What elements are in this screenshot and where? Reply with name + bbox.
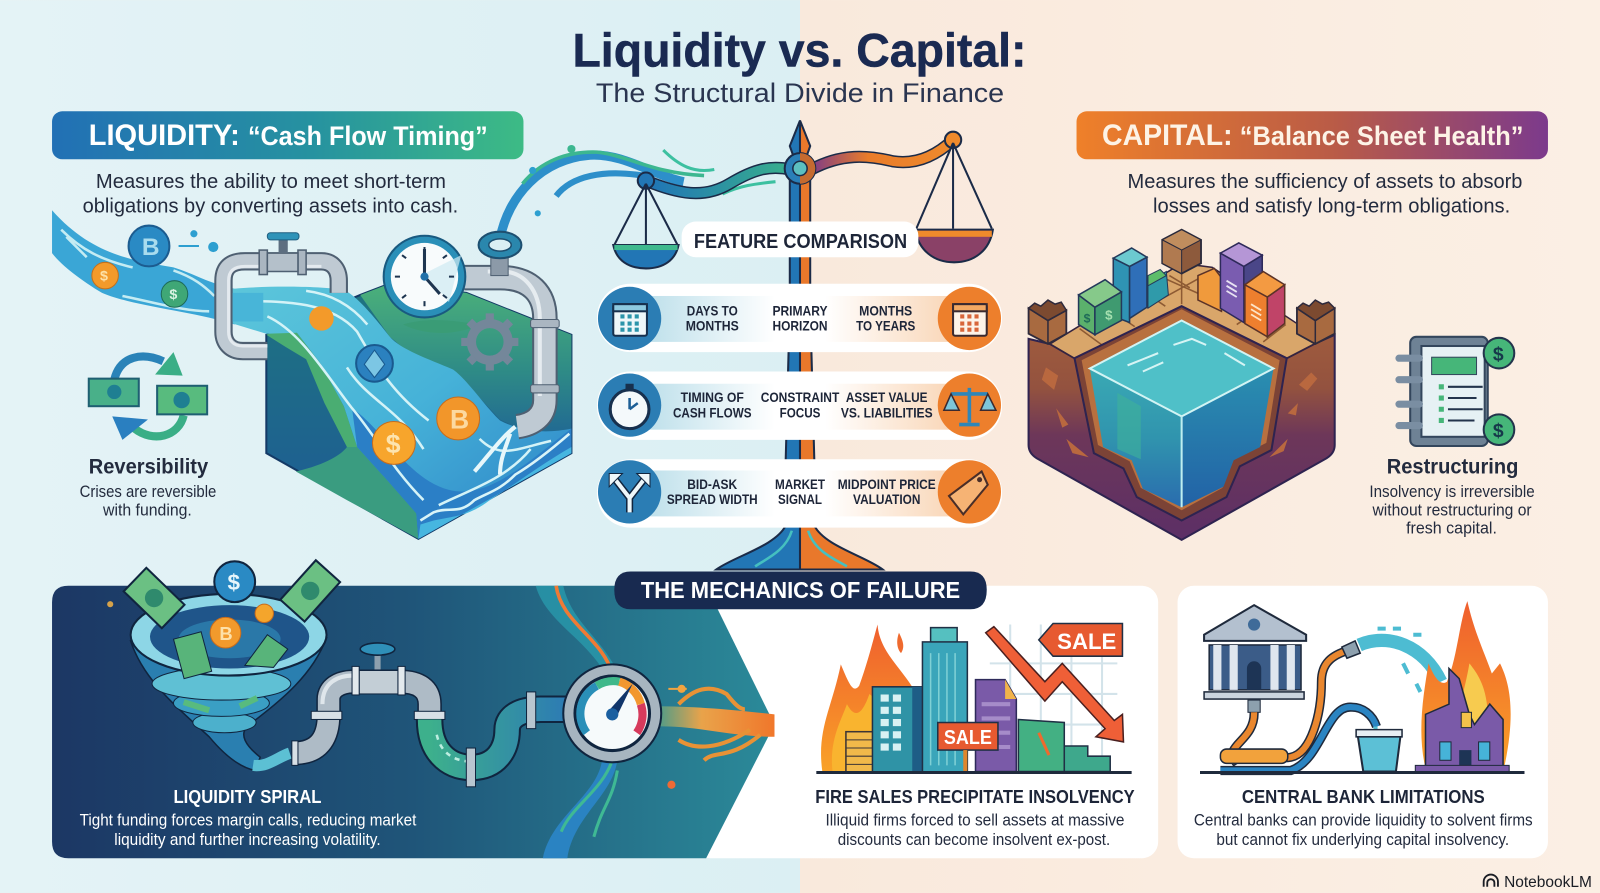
icon: restructuring ledger: $ xyxy=(1493,420,1504,442)
purple building xyxy=(1220,243,1262,323)
panel: liquidity spiral xyxy=(52,560,774,858)
beam left xyxy=(646,168,791,193)
panel: capital header xyxy=(1077,111,1548,159)
panel: fire sales: FIRE SALES PRECIPITATE INSOLVENCY xyxy=(815,786,1135,807)
icon: stopwatch xyxy=(598,374,661,437)
comparison row: primary horizon: TO YEARS xyxy=(856,319,915,335)
icon: fork arrows xyxy=(598,460,661,524)
tornado tail to pipe xyxy=(253,753,290,766)
tornado funnel xyxy=(131,594,327,770)
text: reversibility: Crises are reversible xyxy=(80,483,216,501)
chart: falling market: SALE xyxy=(944,727,992,749)
left pan xyxy=(638,173,654,189)
beam right xyxy=(811,140,953,169)
comparison row: market signal: SPREAD WIDTH xyxy=(667,492,758,508)
illustration: water flowing through pipes onto a block: B xyxy=(142,234,160,261)
pole left half xyxy=(716,120,800,569)
panel: capital header: CAPITAL: xyxy=(1102,119,1233,152)
text: restructuring: Restructuring xyxy=(1387,455,1518,479)
pole right half xyxy=(800,120,883,569)
pipe section: coloured xyxy=(430,692,571,787)
illustration: water flowing through pipes onto a block: $ xyxy=(169,287,177,303)
balance scale xyxy=(613,120,993,569)
icon: gauge xyxy=(563,664,661,762)
pipe section: gray xyxy=(292,643,445,765)
illustration: water flowing through pipes onto a block: B xyxy=(450,405,469,435)
heading: the mechanics of failure xyxy=(614,572,987,609)
text: central bank limitations: CENTRAL BANK LIMITATIONS xyxy=(1242,786,1485,807)
comparison row: market signal: BID-ASK xyxy=(687,477,738,493)
cube faces xyxy=(1090,368,1182,507)
flow out of gauge xyxy=(653,706,774,737)
text: reversibility: Reversibility xyxy=(89,455,208,479)
text: liquidity definition: Measures the ability to meet short-term xyxy=(96,171,446,193)
river xyxy=(233,287,571,539)
pit wall xyxy=(1074,306,1287,520)
small orange building xyxy=(1198,268,1221,311)
icon: orange calendar xyxy=(938,287,1001,350)
text: restructuring: without restructuring or xyxy=(1371,501,1532,519)
illustration: water flowing through pipes onto a block: $ xyxy=(386,429,401,459)
gear xyxy=(471,324,508,360)
panel: liquidity header: “Cash Flow Timing” xyxy=(248,121,488,151)
right castle tower xyxy=(1297,300,1335,344)
icon: restructuring ledger: $ xyxy=(1493,343,1504,365)
text: central bank limitations xyxy=(1194,786,1533,849)
icon: orange scales xyxy=(938,374,1001,437)
rim tiles xyxy=(1050,263,1314,358)
text: capital definition: Measures the sufficiency of assets to absorb xyxy=(1128,171,1522,193)
panel: central bank limitations xyxy=(1178,586,1548,858)
river over pipe xyxy=(233,293,263,322)
comparison row: constraint focus: TIMING OF xyxy=(681,390,744,406)
right pan xyxy=(945,132,961,148)
comparison row: primary horizon: MONTHS xyxy=(859,303,912,319)
comparison row: market signal: SIGNAL xyxy=(778,492,822,508)
clock xyxy=(384,236,465,317)
highlights xyxy=(245,291,551,505)
text: restructuring: fresh capital. xyxy=(1406,520,1497,538)
illustration: capital block with deep cube xyxy=(1029,230,1335,540)
comparison row: market signal: MIDPOINT PRICE xyxy=(838,477,936,493)
icon: price tag xyxy=(938,460,1001,524)
text: reversibility xyxy=(80,455,216,519)
chart: falling market xyxy=(816,624,1132,773)
water arc to scale xyxy=(500,155,684,239)
comparison row: constraint focus: FOCUS xyxy=(780,405,820,421)
pole base streaks xyxy=(755,531,847,566)
bills and coins: B xyxy=(219,623,233,644)
small teal building xyxy=(1148,272,1168,308)
comparison row: primary horizon: MONTHS xyxy=(686,319,739,335)
heading: feature comparison xyxy=(682,222,918,257)
comparison row: constraint focus: ASSET VALUE xyxy=(846,390,928,406)
spout splash xyxy=(474,427,515,475)
comparison row: market signal: MARKET xyxy=(775,477,825,493)
green money block xyxy=(1079,280,1121,335)
logo: NotebookLM: NotebookLM xyxy=(1504,874,1592,891)
illustration: water flowing through pipes onto a block: $ xyxy=(100,269,108,285)
heading: feature comparison: FEATURE COMPARISON xyxy=(694,231,907,253)
left pipe loop xyxy=(223,261,339,351)
background: liquidity side xyxy=(0,0,800,893)
comparison row: constraint focus: CONSTRAINT xyxy=(761,390,840,406)
panel: liquidity header: LIQUIDITY: xyxy=(89,119,240,152)
right pipe xyxy=(464,278,545,427)
panel: liquidity header xyxy=(52,111,523,159)
coins xyxy=(129,226,169,266)
back tower xyxy=(1162,230,1201,274)
text: central bank limitations: Central banks can provide liquidity to solvent firms xyxy=(1194,812,1533,830)
comparison row: primary horizon: PRIMARY xyxy=(772,303,828,319)
wave foam xyxy=(420,434,569,520)
text: capital definition: losses and satisfy long-term obligations. xyxy=(1153,195,1510,217)
comparison row: constraint focus: VS. LIABILITIES xyxy=(841,405,933,421)
panel: fire sales: discounts can become insolvent ex-post. xyxy=(838,831,1110,849)
flames xyxy=(821,625,918,773)
illustration: central bank, hose and fire xyxy=(1200,601,1524,773)
text: liquidity spiral: Tight funding forces margin calls, reducing market xyxy=(80,812,417,830)
title: Liquidity vs. Capital: xyxy=(572,24,1027,76)
green money block: $ xyxy=(1084,312,1091,326)
icon: blue calendar xyxy=(598,287,661,350)
text: liquidity spiral xyxy=(80,786,417,849)
text: liquidity spiral: LIQUIDITY SPIRAL xyxy=(173,786,321,807)
back hill xyxy=(360,285,571,453)
illustration: water flowing through pipes onto a block xyxy=(52,145,776,539)
text: restructuring xyxy=(1369,455,1535,538)
text: liquidity definition: obligations by converting assets into cash. xyxy=(83,195,458,217)
bills and coins: $ xyxy=(228,570,241,595)
left castle tower xyxy=(1029,300,1066,344)
text: liquidity spiral: liquidity and further increasing volatility. xyxy=(114,831,381,849)
bills and coins xyxy=(107,560,340,679)
orange building xyxy=(1245,272,1285,337)
block sides xyxy=(1029,307,1335,540)
tall blue building xyxy=(1113,248,1147,323)
comparison row: constraint focus xyxy=(597,372,1002,440)
lower water band xyxy=(352,408,571,539)
left stream xyxy=(52,210,235,325)
comparison row: market signal xyxy=(597,459,1002,528)
text: central bank limitations: but cannot fix underlying capital insolvency. xyxy=(1216,831,1509,849)
comparison row: primary horizon: DAYS TO xyxy=(687,303,738,319)
comparison row: primary horizon xyxy=(597,284,1002,352)
comparison row: primary horizon: HORIZON xyxy=(772,319,828,335)
background: capital side xyxy=(800,0,1600,893)
text: liquidity definition xyxy=(83,171,458,217)
streams xyxy=(536,586,618,679)
green money block: $ xyxy=(1105,307,1113,322)
green bank left xyxy=(266,329,357,447)
valve wheel xyxy=(479,232,521,258)
comparison row: market signal: VALUATION xyxy=(853,492,920,508)
icon: restructuring ledger xyxy=(1399,337,1514,446)
text: capital definition xyxy=(1128,171,1522,217)
panel: fire sales xyxy=(694,586,1158,858)
subtitle: The Structural Divide in Finance xyxy=(596,78,1004,108)
chart: falling market: SALE xyxy=(1057,629,1116,654)
comparison row: constraint focus: CASH FLOWS xyxy=(673,405,752,421)
panel: capital header: “Balance Sheet Health” xyxy=(1240,121,1523,151)
icon: reversibility xyxy=(89,352,207,440)
text: restructuring: Insolvency is irreversible xyxy=(1369,483,1535,501)
panel: fire sales: Illiquid firms forced to sell assets at massive xyxy=(826,812,1124,830)
land block xyxy=(266,285,571,539)
text: reversibility: with funding. xyxy=(102,501,192,519)
heading: the mechanics of failure: THE MECHANICS OF FAILURE xyxy=(641,577,960,603)
pivot xyxy=(785,153,815,184)
